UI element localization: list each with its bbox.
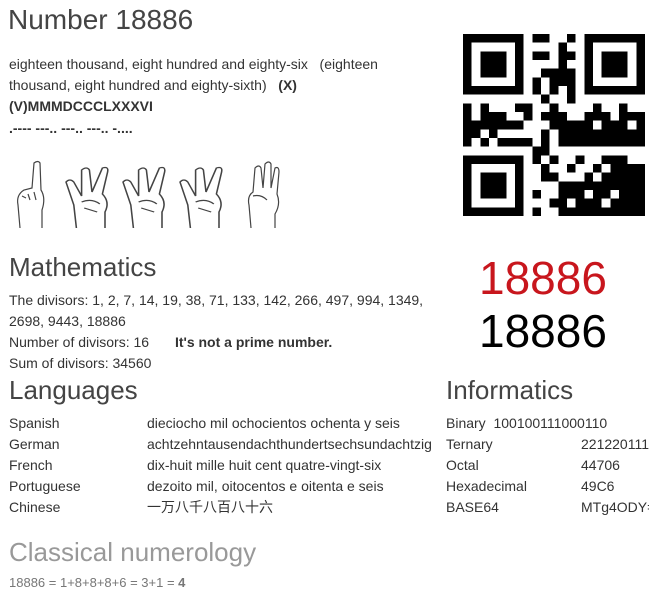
text: divisors: Sum of divisors: 34560: [9, 355, 151, 371]
title: Number 18886: [8, 4, 193, 35]
table: informatics: 221220111: [581, 436, 649, 452]
heading: Languages: Languages: [9, 375, 138, 405]
table: informatics: [446, 415, 649, 515]
table: languages: [9, 415, 432, 515]
text: divisors: Number of divisors: 16 It's not a prime number.: [9, 334, 332, 350]
number red: 18886: [479, 252, 607, 304]
text: morse: .---- ---.. ---.. ---.. -....: [9, 120, 133, 136]
text: divisors: The divisors: 1, 2, 7, 14, 19, 38, 71, 133, 142, 266, 497, 994, 1349,: [9, 292, 423, 308]
table: languages: dezoito mil, oitocentos e oitenta e seis: [147, 478, 384, 494]
text: divisors: [9, 292, 423, 371]
table: languages: Portuguese: [9, 478, 81, 494]
table: languages: achtzehntausendachthundertsechsundachtzig: [147, 436, 432, 452]
text: names: [9, 56, 378, 114]
table: languages: French: [9, 457, 53, 473]
table: languages: Chinese: [9, 499, 60, 515]
table: languages: dix-huit mille huit cent quatre-vingt-six: [147, 457, 381, 473]
QR code: [463, 34, 645, 216]
table: informatics: BASE64: [446, 499, 499, 515]
number black: 18886: [479, 305, 607, 357]
heading: Informatics: Informatics: [446, 375, 573, 405]
table: languages: German: [9, 436, 60, 452]
table: languages: Spanish: [9, 415, 60, 431]
table: informatics: Ternary: [446, 436, 493, 452]
table: informatics: Hexadecimal: [446, 478, 527, 494]
table: languages: dieciocho mil ochocientos ochenta y seis: [147, 415, 400, 431]
text: divisors: 2698, 9443, 18886: [9, 313, 126, 329]
icon: hands: [17, 160, 280, 228]
table: informatics: Binary 100100111000110: [446, 415, 607, 431]
text: names: (V)MMMDCCCLXXXVI: [9, 98, 153, 114]
table: informatics: Octal: [446, 457, 479, 473]
table: informatics: 49C6: [581, 478, 614, 494]
table: languages: 一万八千八百八十六: [147, 499, 273, 515]
text: numerology: 18886 = 1+8+8+8+6 = 3+1 = 4: [9, 575, 185, 590]
text: names: eighteen thousand, eight hundred and eighty-six (eighteen thousand, eight hundred and eighty-sixth) (X): [9, 56, 378, 93]
table: informatics: 44706: [581, 457, 620, 473]
heading: Mathematics: Mathematics: [9, 252, 156, 282]
heading: Classical numerology: Classical numerology: [9, 537, 256, 567]
